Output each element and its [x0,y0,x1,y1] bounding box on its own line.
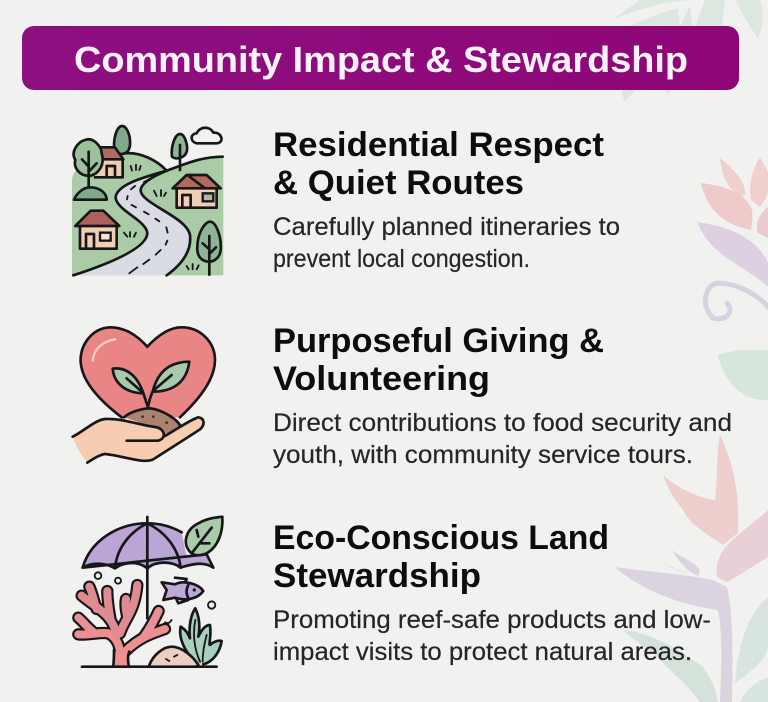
heading line 2: Stewardship [273,557,481,595]
icon: umbrella reef and fish [78,517,222,667]
description line 2: prevent local congestion. [273,245,530,273]
item 1 text [273,126,620,273]
heading: residential respect: Residential Respect [273,126,604,164]
description: Promoting reef-safe products and low- [273,606,711,634]
description: Direct contributions to food security and [273,409,732,437]
icon: heart and sprout in hand [73,327,215,463]
decorative green leaf right [718,350,768,400]
item 3 text [273,519,711,666]
description: Carefully planned itineraries to [273,213,620,241]
title banner [22,26,739,90]
coral fill [78,585,165,662]
description line 2: impact visits to protect natural areas. [273,638,692,666]
title: Community Impact & Stewardship [74,39,688,80]
heading line 2: Volunteering [273,360,490,398]
heading line 2: & Quiet Routes [273,164,524,202]
decorative pink flower right [697,157,768,319]
decorative palm leaves top right [612,0,763,102]
heading: eco-conscious land: Eco-Conscious Land [273,519,609,557]
decorative bird of paradise silhouette [615,435,768,702]
item 2 text [273,322,732,469]
heading: purposeful giving: Purposeful Giving & [273,322,604,360]
coral outline [78,585,165,662]
icon: neighbourhood road [72,126,223,275]
description line 2: youth, with community service tours. [273,441,693,469]
